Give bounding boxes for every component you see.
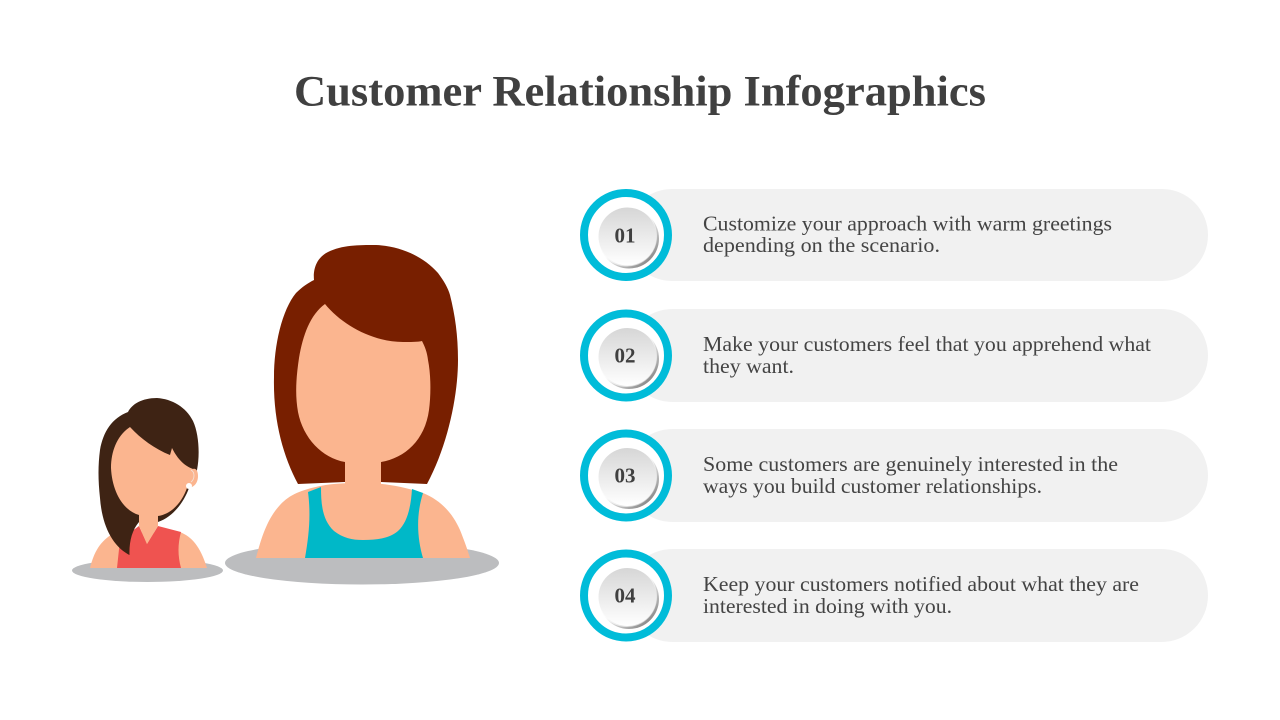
list item 01 — [584, 189, 1208, 281]
illustration: small woman — [72, 398, 223, 582]
shoulders — [256, 483, 470, 558]
face and neck — [296, 304, 430, 484]
title: Customer Relationship Infographics — [294, 68, 986, 116]
text: Make your customers feel that you apprehend what — [703, 332, 1151, 356]
hair — [274, 245, 458, 484]
ring — [584, 554, 668, 638]
text: depending on the scenario. — [703, 233, 940, 257]
illustration: large woman — [225, 245, 499, 584]
number: 02 — [614, 344, 636, 368]
ring — [584, 314, 668, 398]
text: interested in doing with you. — [703, 594, 952, 618]
red top — [117, 526, 181, 568]
shoulders — [90, 532, 207, 568]
text — [703, 332, 1151, 378]
ground shadow — [225, 542, 499, 584]
teal top — [305, 487, 423, 558]
text: they want. — [703, 354, 794, 378]
list item 02 — [584, 309, 1208, 402]
ring — [584, 193, 668, 277]
pill — [626, 189, 1208, 281]
hair — [98, 398, 199, 555]
ground shadow — [72, 559, 223, 582]
ring — [584, 434, 668, 518]
ear detail — [191, 470, 194, 482]
pill — [626, 309, 1208, 402]
earring — [186, 483, 192, 489]
text: Some customers are genuinely interested in the — [703, 452, 1118, 476]
face and neck — [111, 427, 198, 544]
pill — [626, 549, 1208, 642]
list item 04 — [584, 549, 1208, 642]
disc — [597, 206, 659, 268]
number: 01 — [614, 224, 636, 248]
disc — [597, 567, 659, 629]
number: 03 — [614, 464, 636, 488]
text — [703, 452, 1118, 498]
number: 04 — [614, 584, 636, 608]
text: Keep your customers notified about what they are — [703, 572, 1139, 596]
list item 03 — [584, 429, 1208, 522]
text — [703, 572, 1139, 618]
pill — [626, 429, 1208, 522]
disc — [597, 327, 659, 389]
text: Customize your approach with warm greetings — [703, 212, 1112, 236]
text — [703, 212, 1112, 257]
text: ways you build customer relationships. — [703, 474, 1042, 498]
disc — [597, 447, 659, 509]
